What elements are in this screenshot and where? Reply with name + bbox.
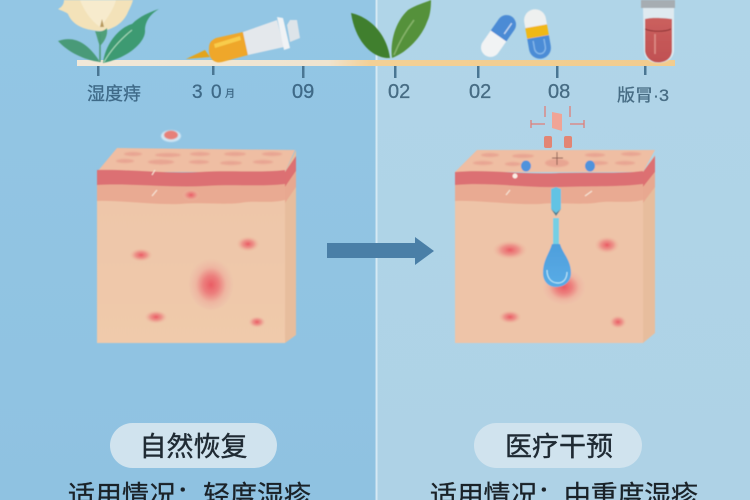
skin pores: [116, 152, 282, 165]
icon: floating skin flake: [161, 130, 181, 142]
skin red layer: [455, 171, 643, 187]
inflamed spots: [492, 240, 528, 260]
timeline labels: 0: [211, 82, 222, 103]
chart: right skin cross-section: [455, 150, 655, 343]
applicator stem: [553, 218, 559, 246]
divider: [376, 0, 378, 500]
icon: syringe: [186, 17, 300, 62]
heading pill: medical intervention: 医疗干预: [505, 432, 613, 462]
skin top surface: [97, 148, 295, 172]
skin right side face: [285, 150, 296, 343]
skin lower layer: [455, 183, 643, 204]
heading pill: natural recovery: [110, 423, 277, 468]
heading pill: natural recovery: 自然恢复: [140, 432, 248, 462]
chart: left skin cross-section: [97, 148, 296, 343]
inflamed spots: [182, 189, 200, 201]
small scratches: [506, 190, 592, 196]
timeline labels: 02: [469, 81, 491, 103]
icon: capsule blue and white: [477, 11, 520, 61]
skin top surface: [455, 150, 655, 172]
skin pores: [473, 152, 641, 167]
timeline bar: [77, 60, 675, 66]
timeline labels: 版冐·3: [617, 86, 669, 105]
panel: medical intervention background: [376, 0, 750, 500]
skin right side face: [643, 155, 655, 343]
applicator tip: [551, 187, 561, 213]
icon: rising particles above right skin: [531, 106, 584, 148]
timeline labels: 月: [225, 88, 235, 100]
icon: flower: [58, 0, 159, 63]
center mark: [552, 152, 563, 165]
panel: natural recovery background: [0, 0, 376, 500]
icon: capsule yellow and blue: [522, 7, 553, 61]
arrow: [327, 237, 434, 265]
timeline labels: 08: [548, 81, 570, 103]
timeline labels: 湿度痔: [87, 84, 141, 104]
skin lower layer: [97, 183, 285, 204]
icon: blood test tube: [641, 0, 675, 63]
timeline labels: 02: [388, 81, 410, 103]
timeline ticks: [97, 66, 646, 78]
timeline labels: 3: [192, 82, 203, 103]
heading pill: medical intervention: [474, 423, 642, 468]
skin red layer: [97, 170, 285, 186]
skin front face: [455, 200, 643, 343]
timeline labels: 09: [292, 81, 314, 103]
applicator drop: [543, 244, 571, 287]
blue droplets on surface: [521, 160, 595, 172]
timeline labels: [87, 81, 669, 105]
skin front face: [97, 200, 285, 343]
icon: green leaves: [351, 0, 431, 58]
